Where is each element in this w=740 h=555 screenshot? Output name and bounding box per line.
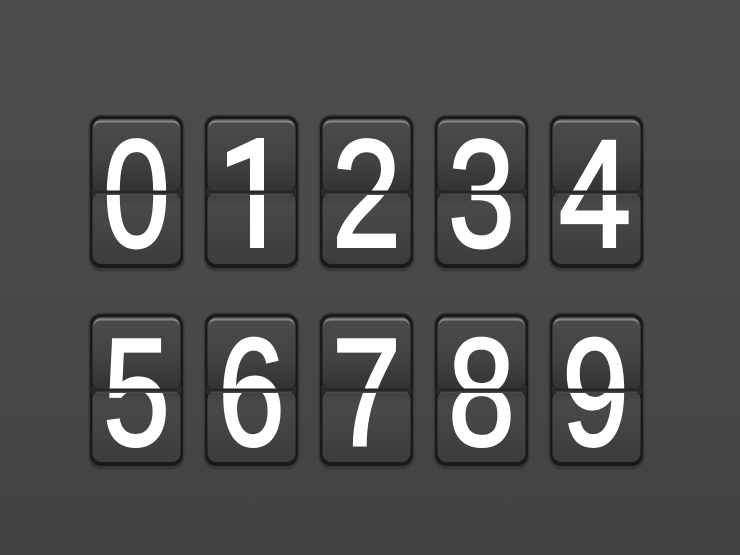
card: digit 5 bbox=[88, 308, 184, 478]
card: digit 0: 0 bbox=[103, 109, 170, 280]
card: digit 4: 4 bbox=[559, 109, 631, 280]
card: digit 9: 9 bbox=[562, 308, 629, 478]
card: digit 1 bbox=[204, 109, 300, 280]
card: digit 6: 6 bbox=[218, 308, 285, 478]
card: digit 6 bbox=[204, 308, 300, 478]
card: digit 1: 1 bbox=[224, 109, 291, 280]
card: digit 3: 3 bbox=[448, 109, 515, 280]
card: digit 9 bbox=[548, 308, 644, 478]
card: digit 0 bbox=[88, 109, 184, 280]
card: digit 8: 8 bbox=[448, 308, 515, 478]
flip counter infographic bbox=[88, 114, 644, 470]
card: digit 5: 5 bbox=[103, 308, 170, 478]
card: digit 7: 7 bbox=[332, 307, 401, 478]
card: digit 3 bbox=[434, 109, 530, 280]
card: digit 8 bbox=[434, 308, 530, 478]
card: digit 2: 2 bbox=[332, 108, 401, 279]
